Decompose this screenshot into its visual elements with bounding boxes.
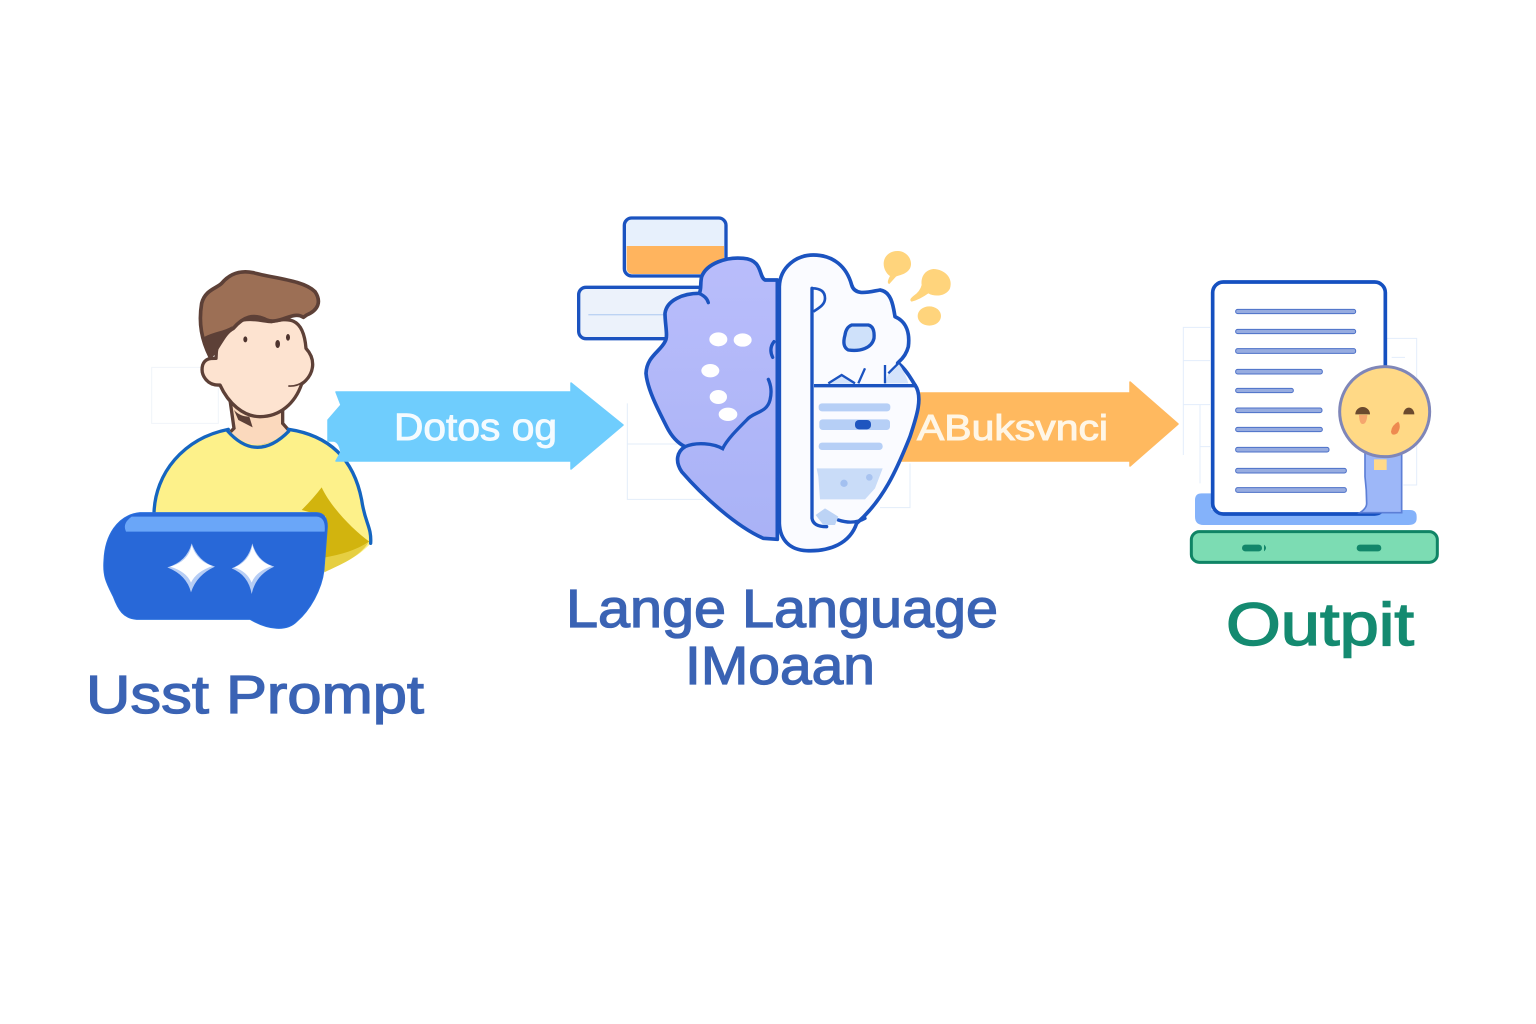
icon: text lines — [819, 403, 890, 450]
icon: green base — [1191, 532, 1437, 562]
icon: inner window — [844, 325, 874, 350]
icon: brain left lobe — [646, 258, 777, 539]
icon: brain fold lines — [685, 293, 774, 449]
icon: sparkle left — [167, 543, 215, 592]
icon: document with reader — [1183, 282, 1437, 562]
heading: language model: Lange Language — [566, 579, 998, 639]
icon: sparkle right — [232, 543, 274, 594]
icon: page text lines — [1236, 309, 1356, 492]
icon: blue platform — [1195, 493, 1417, 525]
icon: left card — [579, 287, 712, 339]
icon: brain dots — [701, 332, 752, 421]
icon: speech bubbles — [884, 251, 951, 326]
panel: output figure — [1183, 282, 1437, 658]
label: blue arrow text: Dotos og — [394, 407, 557, 449]
icon: hair — [200, 272, 318, 357]
icon: brain with cards — [579, 218, 951, 551]
icon: base slots — [1242, 545, 1381, 551]
icon: blue laptop — [104, 513, 327, 628]
arrow: orange — [895, 382, 1178, 466]
panel: language model figure — [566, 218, 998, 696]
heading: output: Outpit — [1226, 591, 1414, 658]
icon: branches — [815, 363, 908, 384]
icon: reader face — [1340, 367, 1430, 457]
heading: language model: IMoaan — [685, 636, 875, 696]
icon: face details — [1355, 407, 1370, 414]
icon: inner panel — [812, 288, 865, 527]
label: orange arrow text: ABuksvnci — [917, 407, 1108, 448]
icon: face — [202, 319, 313, 417]
icon: sweater outline — [154, 429, 371, 543]
icon: reader body — [1360, 453, 1402, 513]
heading: language model — [566, 579, 998, 696]
heading: user prompt: Usst Prompt — [86, 665, 424, 725]
icon: top card — [624, 218, 726, 276]
icon: yellow sweater — [154, 429, 371, 572]
icon: neck — [227, 400, 290, 447]
panel: user prompt figure — [86, 272, 424, 725]
arrow: blue — [328, 383, 623, 469]
icon: sleeve shadow — [302, 487, 369, 557]
icon: sleeve light shadow — [324, 543, 368, 572]
icon: eyes — [243, 334, 290, 348]
icon: sweater collar — [227, 431, 289, 447]
icon: page — [1213, 282, 1385, 514]
icon: laptop highlight — [125, 517, 325, 532]
icon: brain right lobe — [779, 255, 919, 551]
icon: image block — [817, 468, 883, 499]
icon: person at laptop — [104, 272, 371, 628]
